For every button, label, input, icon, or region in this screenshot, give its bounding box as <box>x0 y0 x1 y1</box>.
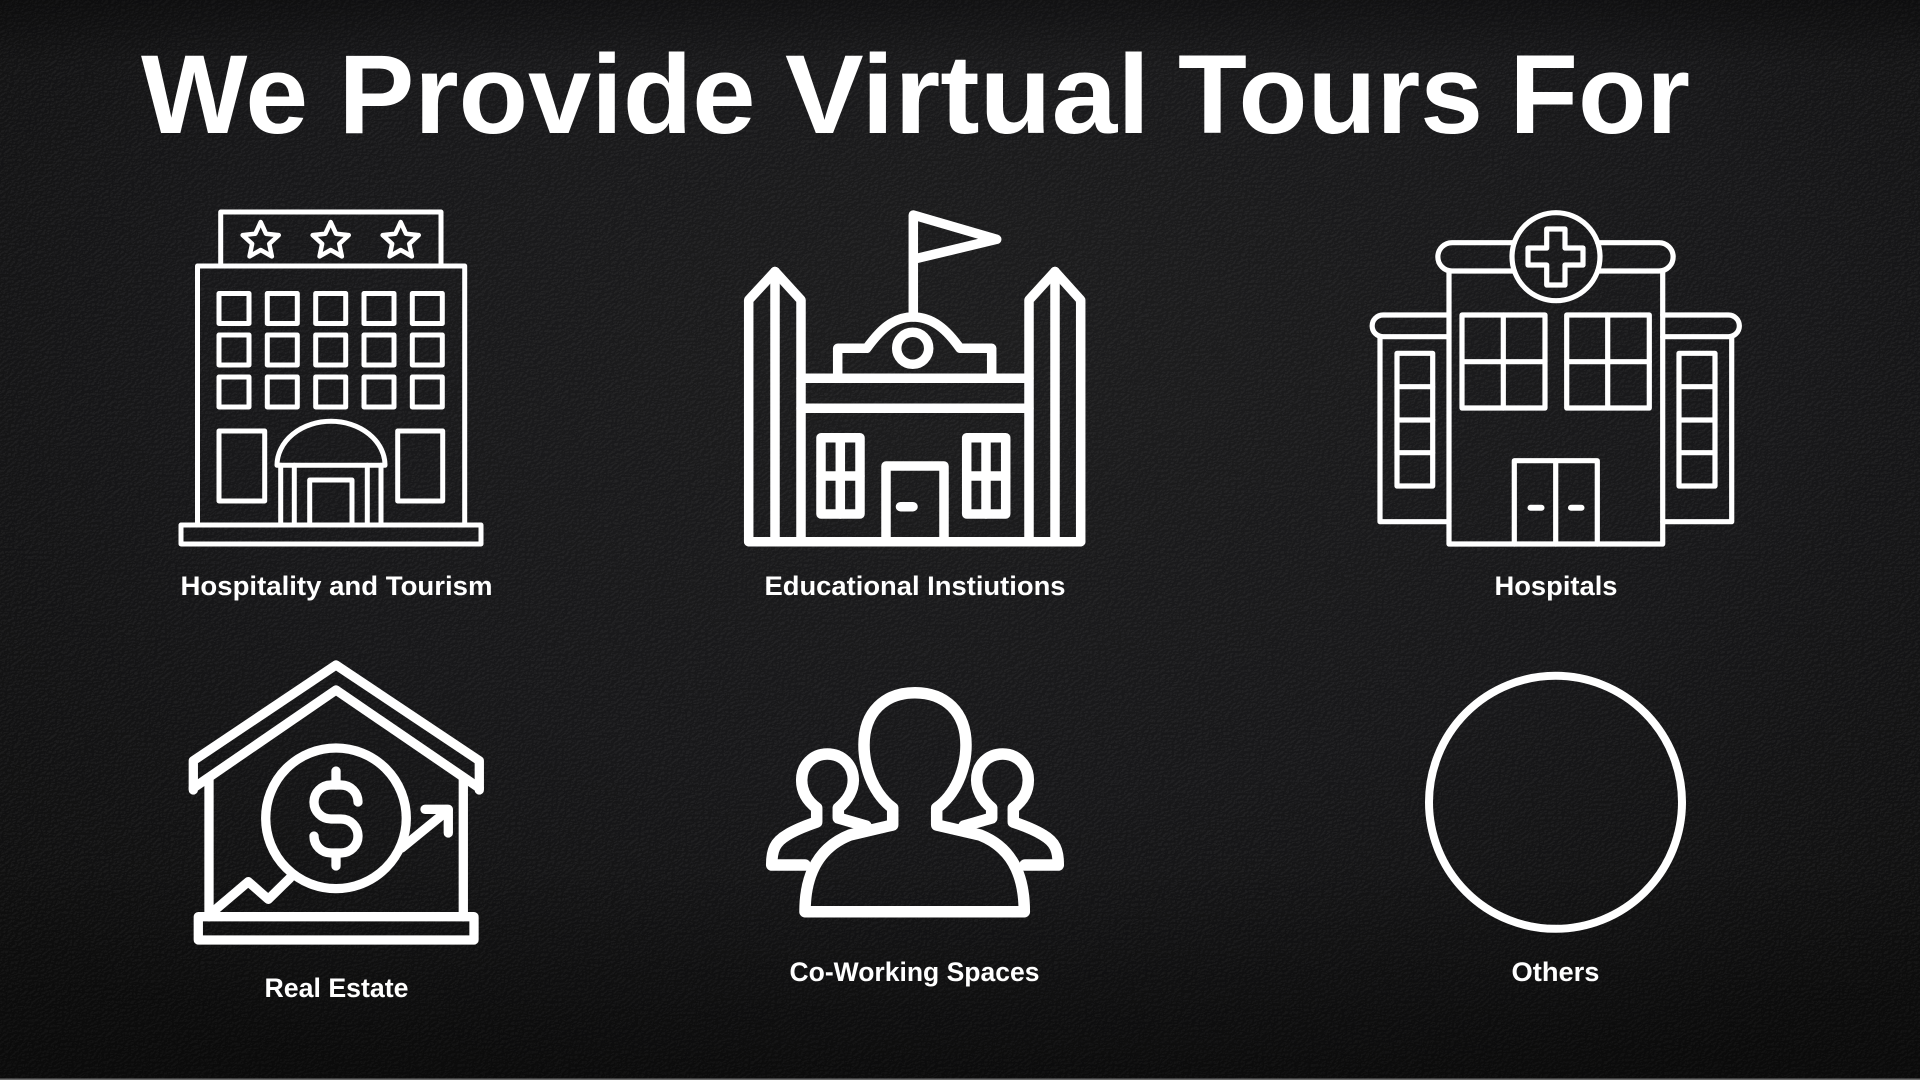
label: Hospitality and Tourism: Hospitality and Tourism <box>180 571 492 601</box>
title: Virtual <box>785 32 1150 157</box>
panel: hospitality and tourism <box>180 212 492 601</box>
panel: real estate <box>193 665 479 1003</box>
title <box>141 32 1690 157</box>
label: Real Estate: Real Estate <box>264 973 408 1003</box>
label: Co-Working Spaces: Co-Working Spaces <box>790 957 1040 987</box>
panel: others <box>1429 676 1682 987</box>
title: We <box>141 32 308 157</box>
label: Others: Others <box>1512 957 1600 987</box>
icon: house with dollar and growth arrow <box>193 665 479 940</box>
title: For <box>1510 32 1690 157</box>
panel: hospitals <box>1372 213 1739 601</box>
panel: educational institutions <box>749 215 1081 601</box>
title: Provide <box>338 32 756 157</box>
icon: empty circle <box>1429 676 1682 929</box>
icon: school <box>749 215 1081 542</box>
label: Educational Instiutions: Educational Instiutions <box>764 571 1066 601</box>
icon: hospital <box>1372 213 1739 544</box>
title: Tours <box>1178 32 1483 157</box>
icon: hotel <box>181 212 481 544</box>
panel: co-working spaces <box>772 693 1058 987</box>
icon: group of three people <box>772 693 1058 912</box>
label: Hospitals: Hospitals <box>1494 571 1618 601</box>
